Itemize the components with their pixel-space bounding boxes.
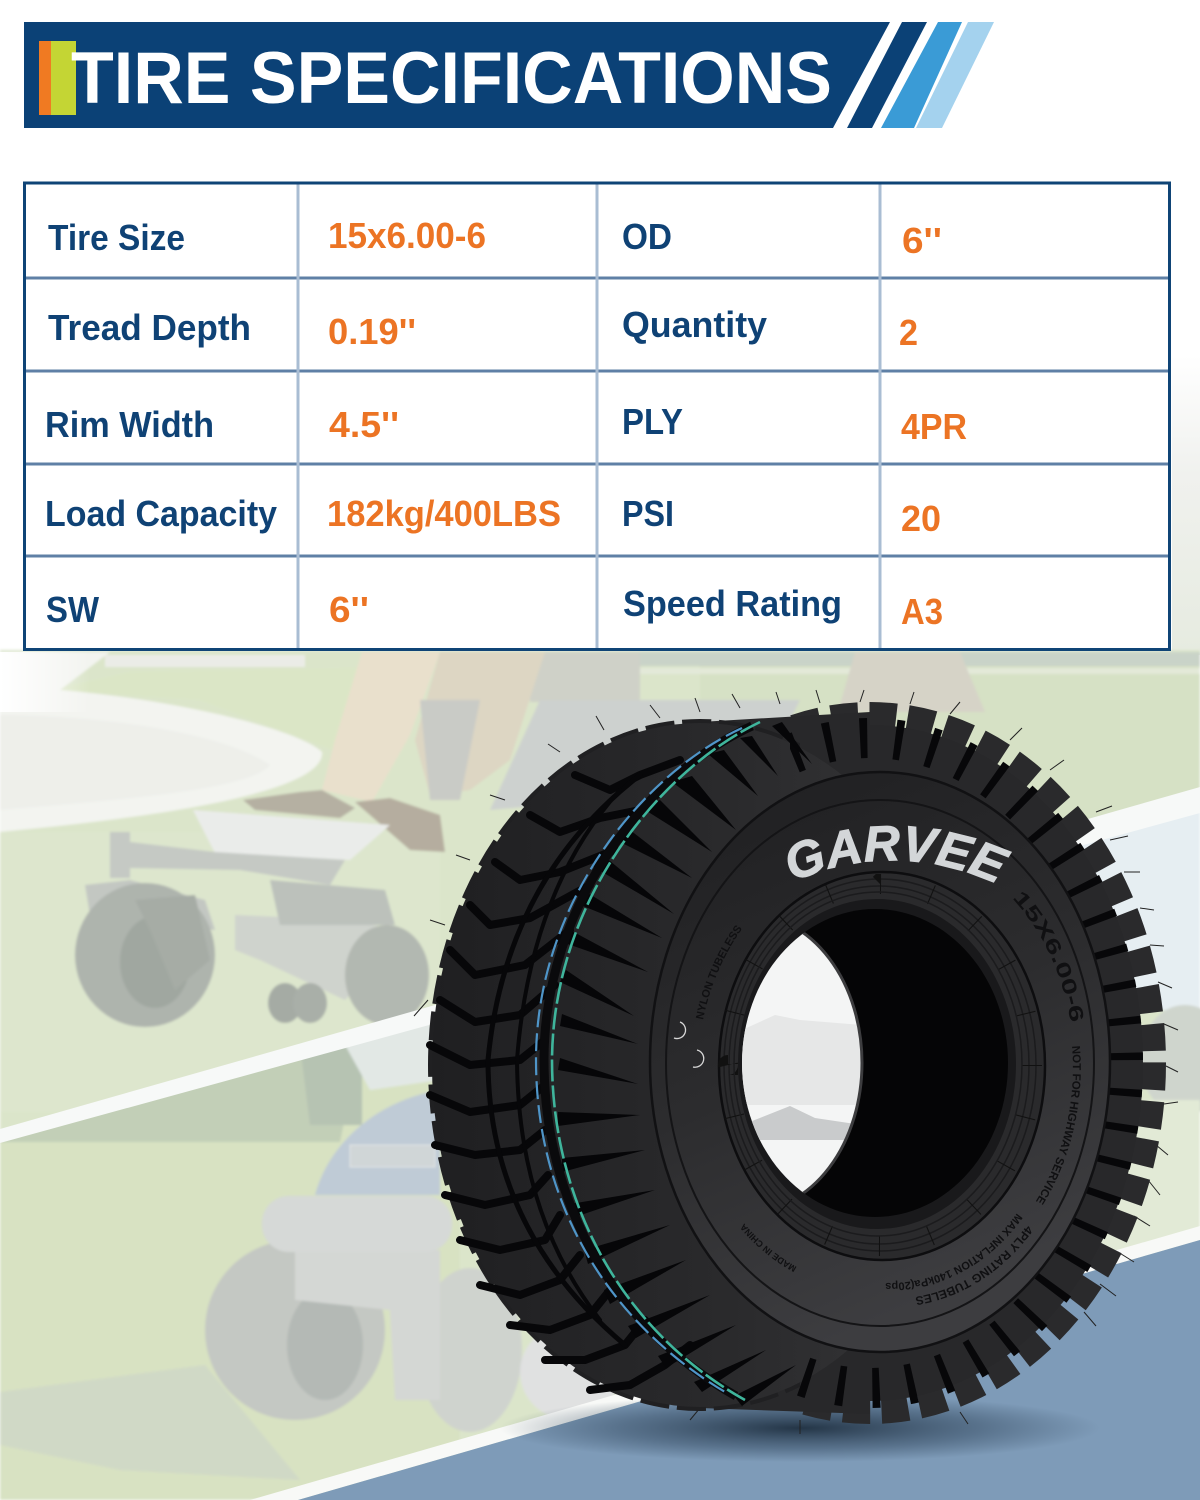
driver legs xyxy=(322,652,440,802)
view through opening xyxy=(742,932,864,1194)
GARVEE logo: GARVEE xyxy=(788,826,1012,883)
row: rim width and ply: Rim Width xyxy=(45,404,214,445)
row: tread depth and quantity: 2 xyxy=(899,312,918,353)
row: SW and speed rating: SW xyxy=(46,589,99,630)
row: tire size and OD xyxy=(48,215,942,261)
tire body xyxy=(597,725,1143,1401)
banner light blue stripe xyxy=(916,22,994,128)
row: rim width and ply xyxy=(45,401,967,447)
tire product photo xyxy=(414,690,1178,1434)
whisker hairs xyxy=(414,690,1178,1434)
left tread block grooves xyxy=(430,760,690,1390)
row: load capacity and PSI: Load Capacity xyxy=(45,493,277,534)
mower rollers xyxy=(268,983,302,1023)
sidewall rating marking: 4PLY RATING TUBELESS xyxy=(916,1226,1032,1305)
row: SW and speed rating: 6'' xyxy=(329,589,369,630)
ground shadow xyxy=(500,1394,1100,1462)
row: load capacity and PSI: 182kg/400LBS xyxy=(327,493,561,534)
row: rim width and ply: PLY xyxy=(622,401,683,442)
center seam lines xyxy=(536,722,760,1400)
mower front wheel xyxy=(75,883,215,1027)
golf cart hood xyxy=(315,1090,440,1195)
sidewall inflation marking: MAX INFLATION 140kPa(20psi) xyxy=(886,1214,1022,1290)
orange accent xyxy=(39,41,52,115)
row: SW and speed rating: A3 xyxy=(901,591,943,632)
tread body xyxy=(432,723,968,1407)
row: tread depth and quantity: Tread Depth xyxy=(48,307,251,348)
row: rim width and ply: 4PR xyxy=(901,406,967,447)
upper lawn and path xyxy=(50,668,360,760)
sidewall service marking: NOT FOR HIGHWAY SERVICE xyxy=(1036,1046,1081,1205)
row: load capacity and PSI: 20 xyxy=(901,498,941,539)
sidewall rating marking xyxy=(916,1226,1032,1305)
tire opening xyxy=(742,909,1008,1217)
driver boots xyxy=(243,790,355,818)
row: tire size and OD: 6'' xyxy=(902,220,942,261)
row: tire size and OD: OD xyxy=(622,216,672,257)
row: tread depth and quantity: 0.19'' xyxy=(328,311,416,352)
upper white diagonal band xyxy=(0,787,1200,1143)
row: load capacity and PSI: PSI xyxy=(622,493,674,534)
lime accent xyxy=(51,41,76,115)
golf cart front wheel xyxy=(205,1240,385,1420)
valve marks xyxy=(674,1022,704,1067)
shoulder grooves xyxy=(790,718,1143,1408)
lower lawn xyxy=(0,1000,460,1500)
background photo: washed-out mowers on a lawn xyxy=(0,355,1200,1500)
golf cart rear wheel xyxy=(418,1268,522,1432)
GARVEE logo xyxy=(788,826,1012,883)
sidewall inner ring xyxy=(666,800,1094,1326)
row: SW and speed rating: Speed Rating xyxy=(623,583,842,624)
mower rear wheel xyxy=(345,925,429,1025)
golf cart hub xyxy=(520,1324,620,1420)
golf cart bumper xyxy=(262,1196,452,1252)
blue ground xyxy=(298,1240,1200,1500)
lower white diagonal band xyxy=(250,1226,1200,1500)
right tread lugs xyxy=(587,715,1153,1411)
row: SW and speed rating xyxy=(46,583,943,632)
bead ring ribs xyxy=(719,872,1045,1260)
sidewall inflation marking xyxy=(886,1214,1022,1290)
row: rim width and ply: 4.5'' xyxy=(329,404,399,445)
row: tread depth and quantity xyxy=(48,304,918,353)
banner bar xyxy=(24,22,890,128)
tread bridge xyxy=(700,712,870,1414)
sidewall origin marking: MADE IN CHINA xyxy=(741,1224,796,1272)
left tread edge xyxy=(428,719,798,1411)
right tread block grooves xyxy=(558,722,812,1406)
specification table xyxy=(24,183,1170,650)
mower deck xyxy=(193,810,390,860)
row: load capacity and PSI xyxy=(45,493,941,539)
row: tire size and OD: 15x6.00-6 xyxy=(328,215,486,256)
banner blue stripe xyxy=(881,22,962,128)
sidewall nylon marking: NYLON TUBELESS xyxy=(696,926,741,1020)
header banner xyxy=(24,22,994,128)
row: tire size and OD: Tire Size xyxy=(48,217,185,258)
right lawn xyxy=(700,652,1200,825)
sidewall size marking: 15X6.00-6 xyxy=(1014,892,1084,1022)
banner navy stripe xyxy=(847,22,927,128)
golf cart grille xyxy=(295,1250,440,1400)
row: tread depth and quantity: Quantity xyxy=(622,304,767,345)
sidewall outer ring xyxy=(650,772,1110,1352)
title: TIRE SPECIFICATIONS xyxy=(71,38,832,119)
